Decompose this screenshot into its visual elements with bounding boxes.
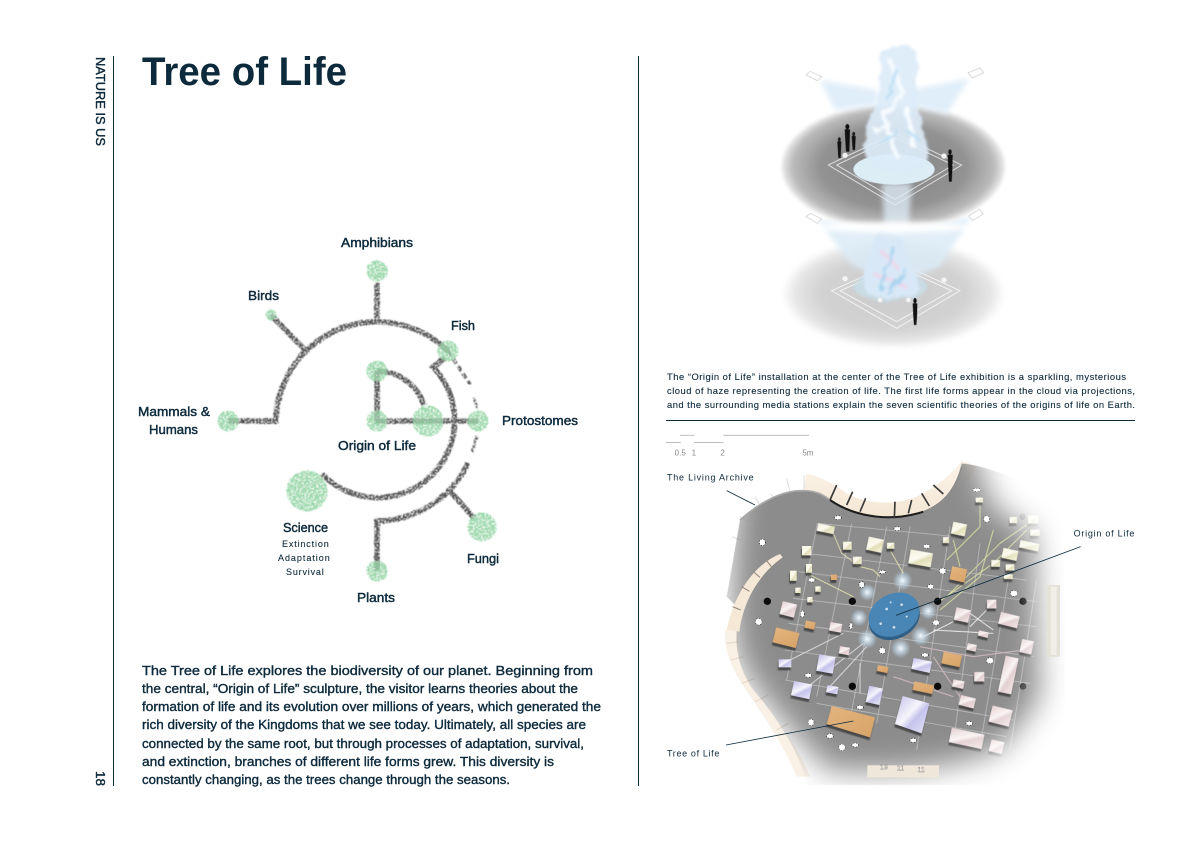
scale bar bbox=[666, 435, 814, 457]
upper hologram base bbox=[853, 154, 935, 185]
tree of life diagram bbox=[138, 235, 579, 605]
structural columns bbox=[764, 513, 1027, 690]
scale bar: 0.5 bbox=[675, 448, 686, 457]
exhibit tables: wood bbox=[773, 566, 967, 737]
body text: constantly changing, as the trees change through the seasons. bbox=[142, 772, 510, 787]
page number: 18 bbox=[93, 771, 108, 786]
upper floor square bbox=[828, 133, 962, 205]
diagram labels: Fungi bbox=[467, 551, 499, 566]
tree nodes bbox=[218, 260, 496, 582]
diagram labels: Adaptation bbox=[278, 553, 330, 563]
diagram labels: Birds bbox=[248, 288, 280, 303]
diagram labels: Protostomes bbox=[502, 413, 579, 428]
scale bar: 5m bbox=[802, 448, 814, 457]
bottom bench bbox=[867, 762, 939, 777]
installation caption: and the surrounding media stations explain the seven scientific theories of the origins of life on Earth. bbox=[667, 399, 1135, 410]
projectors bbox=[806, 68, 984, 223]
bottom bench: 11 bbox=[917, 765, 925, 774]
floor surface bbox=[727, 463, 1065, 785]
body text: connected by the same root, but through processes of adaptation, survival, bbox=[142, 736, 584, 751]
lower projection cones bbox=[818, 217, 972, 283]
installation caption bbox=[667, 371, 1135, 410]
tree branches bbox=[228, 283, 478, 571]
cables bbox=[783, 497, 1033, 697]
bottom bench: 19 bbox=[880, 762, 888, 771]
floor grid bbox=[785, 523, 1037, 750]
diagram labels: Extinction bbox=[282, 539, 329, 549]
diagram labels: Mammals & bbox=[138, 404, 210, 419]
scale bar: 1 bbox=[692, 448, 697, 457]
lower floor square bbox=[832, 262, 960, 328]
isometric installation drawing bbox=[782, 44, 1005, 348]
diagram labels: Amphibians bbox=[341, 235, 414, 250]
visitors bbox=[837, 124, 953, 325]
title: Tree of Life bbox=[142, 50, 347, 94]
diagram labels: Plants bbox=[357, 590, 396, 605]
body text: the central, “Origin of Life” sculpture, the visitor learns theories about the bbox=[142, 681, 578, 696]
body text: formation of life and its evolution over millions of years, which generated the bbox=[142, 699, 601, 714]
floor plan bbox=[666, 435, 1134, 785]
callout: tree of life: Tree of Life bbox=[667, 748, 719, 758]
floor lights bbox=[842, 153, 947, 302]
diagram labels: Science bbox=[283, 520, 328, 535]
callout: origin of life bbox=[896, 529, 1134, 615]
callout: tree of life bbox=[667, 721, 853, 758]
body text: and extinction, branches of different life forms grew. This diversity is bbox=[142, 754, 554, 769]
caption rule bbox=[666, 420, 1135, 422]
exhibit tables: cream bbox=[790, 498, 1040, 602]
archive bench bbox=[727, 554, 783, 632]
callout: origin of life: Origin of Life bbox=[1074, 529, 1134, 539]
installation caption: cloud of haze representing the creation of life. The first life forms appear in the cloud via projections, bbox=[667, 385, 1135, 396]
upper hologram figure bbox=[864, 44, 929, 172]
diagram labels: Origin of Life bbox=[338, 438, 416, 453]
installation caption: The “Origin of Life” installation at the center of the Tree of Life exhibition is a sparkling, mysterious bbox=[667, 371, 1126, 382]
right wall bench bbox=[1047, 585, 1060, 657]
visitor markers bbox=[755, 488, 1018, 751]
connecting light column bbox=[813, 183, 973, 237]
bottom bench: 11 bbox=[897, 764, 904, 773]
archive wall band bbox=[725, 460, 977, 777]
lower hologram bbox=[853, 230, 927, 301]
body text bbox=[142, 663, 601, 787]
diagram labels: Survival bbox=[286, 567, 324, 577]
exhibit tables: lavender bbox=[779, 654, 932, 733]
column divider bbox=[638, 56, 640, 786]
exhibit tables: pink bbox=[780, 600, 1034, 754]
diagram labels bbox=[138, 235, 579, 605]
callout: the living archive bbox=[667, 473, 755, 505]
diagram labels: Fish bbox=[451, 318, 475, 333]
sidebar: section label: NATURE IS US bbox=[93, 57, 107, 146]
diagram labels: Humans bbox=[149, 422, 198, 437]
wall edge bbox=[740, 467, 962, 520]
origin of life disc bbox=[868, 592, 920, 640]
media stations glow bbox=[850, 571, 937, 658]
callout: the living archive: The Living Archive bbox=[667, 473, 754, 483]
scale bar: 2 bbox=[720, 448, 725, 457]
body text: rich diversity of the Kingdoms that we see today. Ultimately, all species are bbox=[142, 717, 586, 732]
upper projection cones bbox=[820, 78, 970, 113]
body text: The Tree of Life explores the biodiversity of our planet. Beginning from bbox=[142, 663, 593, 678]
lower floor bbox=[782, 238, 1005, 348]
upper floor bbox=[782, 104, 1005, 229]
